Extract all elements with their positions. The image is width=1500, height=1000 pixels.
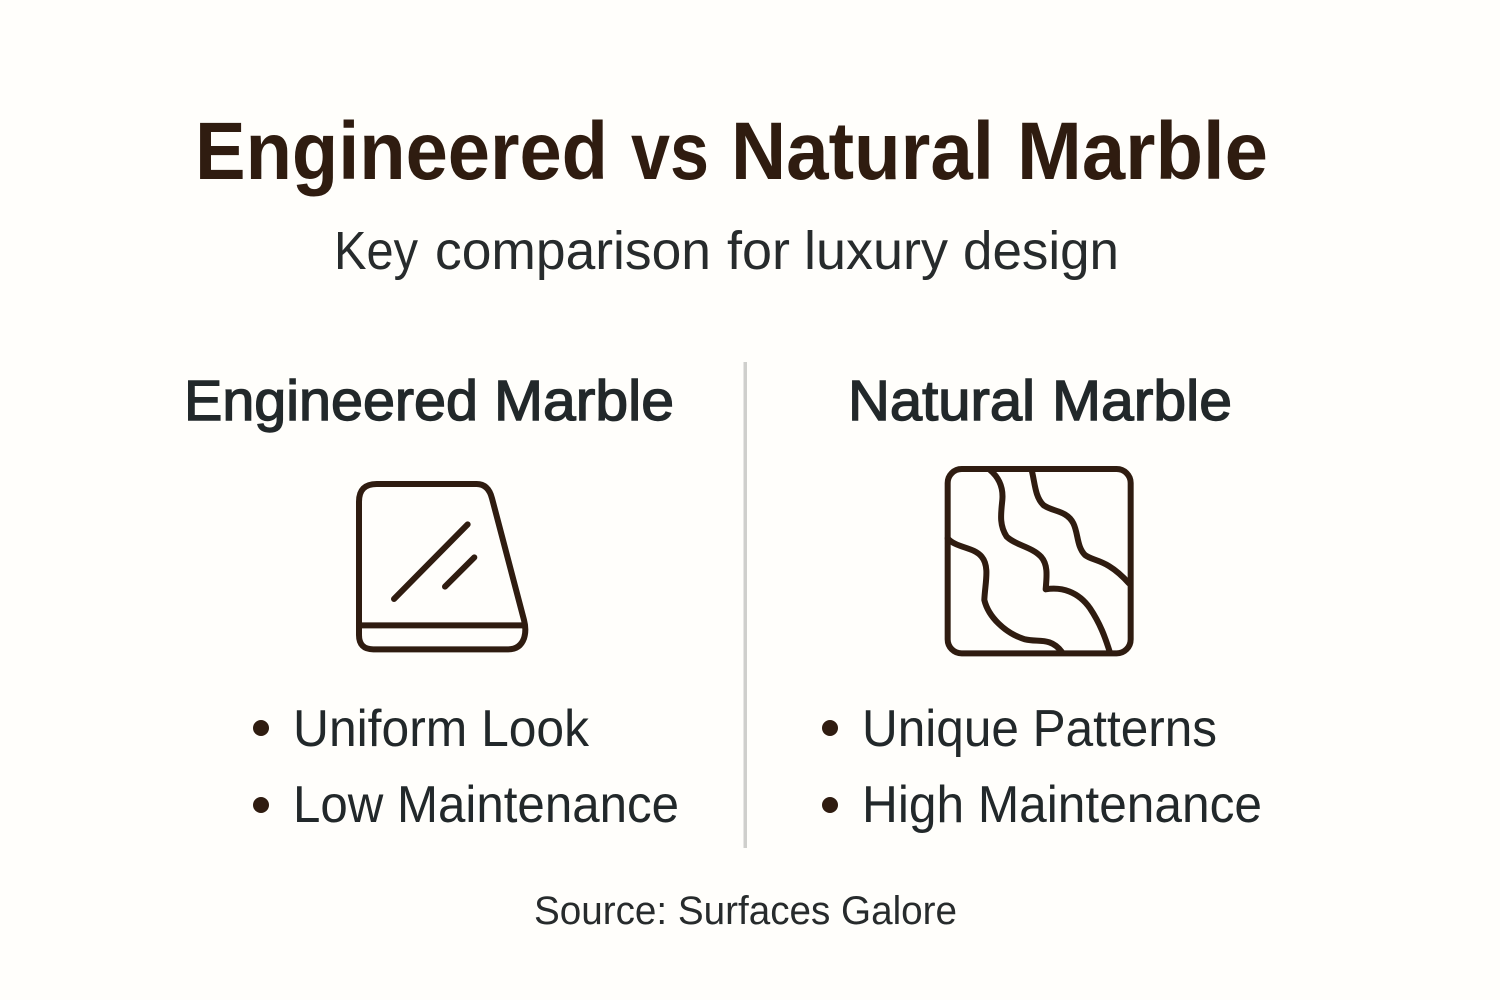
subtitle: luxury [804,221,948,281]
subtitle: for [727,221,790,281]
list: engineered marble traits [253,700,679,834]
subtitle: comparison [435,221,711,281]
subtitle: Key [334,221,418,281]
list: natural marble traits [822,700,1262,834]
heading: engineered marble: Engineered [184,369,478,433]
title: Marble [1017,106,1268,197]
source note: Source: Surfaces Galore [534,889,957,933]
title: Natural [731,106,994,197]
title: Engineered [195,106,608,197]
subtitle: design [963,221,1119,281]
panel: natural marble [822,369,1262,834]
bullet item: unique patterns: Unique Patterns [862,700,1217,758]
title: vs [631,106,709,197]
heading: natural marble: Natural [848,369,1035,433]
heading: natural marble: Marble [1052,369,1232,433]
center divider [744,362,747,848]
panel: engineered marble [184,369,679,834]
bullet item: high maintenance: High Maintenance [862,776,1262,834]
icon: veined marble tile [948,469,1131,653]
heading: engineered marble: Marble [494,369,674,433]
bullet item: uniform look: Uniform Look [293,700,590,758]
bullet item: low maintenance: Low Maintenance [293,776,679,834]
icon: engineered slab [359,484,525,649]
